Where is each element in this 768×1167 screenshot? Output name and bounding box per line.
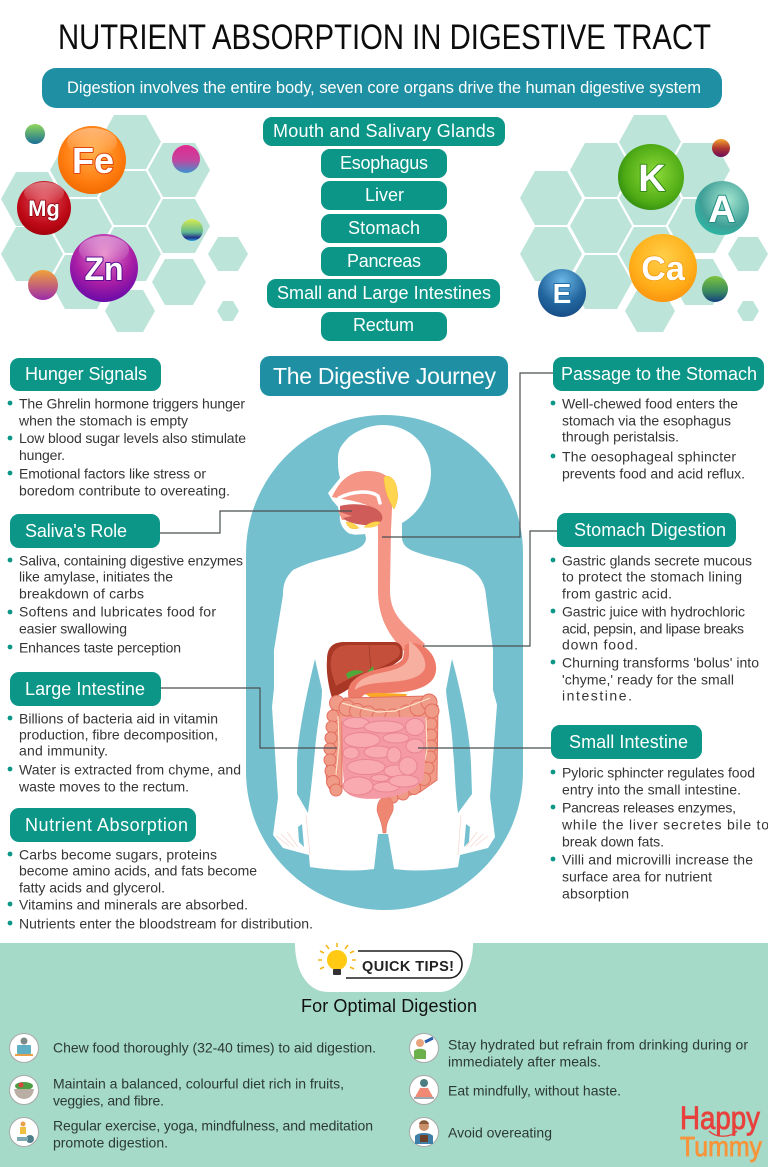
bullet text: breakdown of carbs (19, 586, 144, 602)
tip: eat mindfully (410, 1076, 621, 1104)
bullet text (8, 552, 243, 656)
bullet text: like amylase, initiates the (19, 568, 173, 584)
left arm gap (297, 659, 322, 813)
organ: stomach (321, 214, 447, 243)
bullet text: intestine. (562, 688, 632, 704)
bullet text: Gastric glands secrete mucous (562, 552, 752, 568)
heading: Large Intestine (25, 679, 145, 699)
icon: person chewing (10, 1034, 38, 1062)
small intestine (342, 717, 426, 799)
panel: small intestine (551, 725, 768, 902)
icon: calcium ball Ca: Ca (641, 250, 686, 288)
bullet text (8, 846, 313, 932)
lips (338, 510, 352, 520)
bullet text: Vitamins and minerals are absorbed. (19, 896, 248, 912)
bullet text: from gastric acid. (562, 586, 672, 602)
heading: Saliva's Role (25, 521, 127, 541)
gallbladder (346, 666, 374, 679)
bullet text: The oesophageal sphincter (562, 448, 736, 464)
icon: pink sphere (172, 145, 200, 173)
esophagus and oral cavity (332, 471, 425, 660)
bullet text: easier swallowing (19, 620, 127, 636)
bullet text (551, 396, 745, 482)
tip: chew food (10, 1034, 376, 1062)
heading (10, 672, 161, 706)
heading: for optimal digestion: For Optimal Digestion (301, 996, 477, 1016)
heading (10, 808, 196, 842)
icon: zinc ball Zn (70, 234, 138, 302)
bullet text: Emotional factors like stress or (19, 466, 206, 482)
icon: iron ball Fe (58, 126, 126, 194)
icon: vitamin E ball (538, 269, 586, 317)
bullet text (8, 710, 241, 794)
mouth cavity (340, 504, 382, 525)
panel: stomach digestion (551, 513, 759, 704)
icon: green-navy sphere (702, 276, 728, 302)
icon: vitamin A ball: A (708, 189, 736, 231)
body illustration with digestive organs (246, 415, 523, 910)
bullet text: boredom contribute to overeating. (19, 482, 230, 498)
organ: mouth and salivary glands: Mouth and Salivary Glands (273, 121, 495, 141)
panel: large intestine (8, 672, 241, 794)
list: seven core organs (263, 117, 505, 341)
bullet text: to protect the stomach lining (562, 568, 742, 584)
large intestine (324, 694, 439, 803)
heading: Hunger Signals (25, 364, 147, 384)
organ: small and large intestines: Small and Large Intestines (277, 283, 491, 303)
right arm gap (446, 659, 472, 813)
tip: stay hydrated: immediately after meals. (448, 1054, 601, 1070)
bullet text: acid, pepsin, and lipase breaks (562, 620, 744, 636)
bullet text: waste moves to the rectum. (18, 778, 189, 794)
icon: orange-purple sphere (28, 270, 58, 300)
tip: eat mindfully: Eat mindfully, without haste. (448, 1082, 621, 1098)
bullet text: Carbs become sugars, proteins (19, 846, 217, 862)
organ: mouth and salivary glands (263, 117, 505, 146)
bullet text: Villi and microvilli increase the (562, 852, 753, 868)
bullet text: fatty acids and glycerol. (19, 880, 165, 896)
icon: vitamin A ball (695, 181, 749, 235)
icon: person drinking (410, 1034, 438, 1062)
bullet text: break down fats. (562, 834, 664, 850)
bullet text: surface area for nutrient (562, 868, 712, 884)
bullet text: The Ghrelin hormone triggers hunger (19, 396, 245, 412)
heading (10, 514, 160, 548)
bullet text: Low blood sugar levels also stimulate (19, 430, 246, 446)
organ: esophagus (321, 149, 447, 178)
tip: balanced diet (10, 1076, 344, 1108)
tip: regular exercise: Regular exercise, yoga, mindfulness, and meditation (53, 1118, 373, 1134)
organ: liver (321, 181, 447, 210)
heading (557, 513, 736, 547)
heading: the digestive journey: The Digestive Journey (273, 363, 496, 389)
callout line: saliva to mouth (160, 511, 352, 533)
tip: stay hydrated (410, 1034, 748, 1070)
icon: vitamin K ball: K (638, 158, 666, 200)
tip: stay hydrated: Stay hydrated but refrain from drinking during or (448, 1036, 748, 1052)
bullet text (8, 396, 246, 498)
stomach (348, 641, 436, 714)
pancreas (362, 692, 407, 703)
icon: yellow-blue sphere (181, 219, 203, 241)
panel: left hexagon background (1, 115, 248, 332)
heading: Nutrient Absorption (25, 815, 188, 835)
bullet text: Gastric juice with hydrochloric (562, 604, 745, 620)
bullet text: Saliva, containing digestive enzymes (19, 552, 243, 568)
bullet text: prevents food and acid reflux. (562, 466, 745, 482)
tip: balanced diet: Maintain a balanced, colourful diet rich in fruits, (53, 1076, 344, 1092)
tip: regular exercise (10, 1118, 373, 1150)
panel: right hexagon background (520, 115, 768, 332)
icon: small green sphere (25, 124, 45, 144)
organ: pancreas: Pancreas (347, 251, 421, 271)
icon: maroon sphere (712, 139, 730, 157)
panel: passage to the stomach (551, 357, 764, 482)
bullet text: hunger. (19, 447, 65, 463)
hands (298, 824, 470, 847)
icon: magnesium ball Mg: Mg (28, 196, 60, 221)
bullet text: Enhances taste perception (19, 640, 181, 656)
bullet text (551, 552, 759, 704)
heading: the digestive journey (260, 356, 508, 396)
heading: Stomach Digestion (574, 520, 726, 540)
bullet text (551, 764, 768, 902)
organ: liver: Liver (365, 185, 404, 205)
bullet text: down food. (562, 636, 638, 652)
tip: regular exercise: promote digestion. (53, 1134, 168, 1150)
bullet text: 'chyme,' ready for the small (562, 672, 734, 688)
palate (339, 492, 380, 503)
organ: rectum (321, 312, 447, 341)
callout line: passage to esophagus (382, 373, 553, 537)
icon: man overeating (410, 1118, 438, 1146)
bullet text: when the stomach is empty (18, 412, 188, 428)
organ: rectum: Rectum (353, 315, 414, 335)
tip: avoid overeating (410, 1118, 552, 1146)
bullet text: become amino acids, and fats become (19, 862, 257, 878)
bullet text: Billions of bacteria aid in vitamin (19, 710, 218, 726)
bullet text: while the liver secretes bile to (561, 816, 768, 832)
bullet text: absorption (562, 886, 629, 902)
tip: chew food: Chew food thoroughly (32-40 times) to aid digestion. (53, 1040, 376, 1056)
banner: intro statement: Digestion involves the entire body, seven core organs drive the human digestive system (67, 79, 701, 97)
icon: zinc ball Zn: Zn (84, 251, 124, 287)
icon: iron ball Fe: Fe (72, 140, 114, 181)
callout line: large intestine (161, 688, 337, 748)
bullet text: Pancreas releases enzymes, (562, 800, 736, 816)
heading (553, 357, 764, 391)
rectum (377, 796, 393, 833)
banner: intro statement (42, 68, 722, 108)
icon: exercise bike (10, 1118, 38, 1146)
callout line: stomach digestion to stomach (423, 531, 557, 646)
bullet text: Churning transforms 'bolus' into (562, 654, 759, 670)
heading: Small Intestine (569, 732, 688, 752)
bullet text: through peristalsis. (562, 428, 679, 444)
bullet text: and immunity. (19, 742, 108, 758)
organ: esophagus: Esophagus (340, 153, 428, 173)
organ: small and large intestines (267, 279, 500, 308)
bullet text: stomach via the esophagus (562, 412, 731, 428)
icon: vitamin E ball: E (553, 278, 571, 309)
heading (551, 725, 702, 759)
liver (327, 642, 403, 698)
bullet text: Nutrients enter the bloodstream for distribution. (19, 916, 313, 932)
heading: Passage to the Stomach (561, 364, 757, 384)
bullet text: entry into the small intestine. (562, 782, 741, 798)
bullet text: Well-chewed food enters the (562, 396, 738, 412)
badge: quick tips (295, 943, 473, 992)
panel: nutrient absorption (8, 808, 313, 932)
bullet text: Softens and lubricates food for (19, 604, 216, 620)
icon: salad bowl (10, 1076, 38, 1104)
panel: saliva's role (8, 514, 243, 656)
heading (10, 358, 161, 391)
icon: meditating person (410, 1076, 438, 1104)
icon: magnesium ball Mg (17, 181, 71, 235)
tip: avoid overeating: Avoid overeating (448, 1124, 552, 1140)
bullet text: production, fibre decomposition, (19, 726, 218, 742)
body silhouette (272, 425, 497, 870)
icon: calcium ball Ca (629, 234, 697, 302)
icon: lightbulb (318, 943, 356, 975)
icon: vitamin K ball (618, 144, 684, 210)
organ: pancreas (321, 247, 447, 276)
bullet text: Water is extracted from chyme, and (19, 762, 241, 778)
callout line: small intestine (418, 747, 551, 749)
logo: happy tummy (680, 1100, 762, 1162)
panel: hunger signals (8, 358, 246, 498)
badge: quick tips: QUICK TIPS! (362, 959, 454, 975)
panel: quick tips background (0, 943, 768, 1167)
organ: stomach: Stomach (348, 218, 420, 238)
tip: balanced diet: veggies, and fibre. (53, 1092, 164, 1108)
bullet text: Pyloric sphincter regulates food (562, 764, 755, 780)
salivary glands (346, 476, 398, 529)
capsule background (246, 415, 523, 910)
